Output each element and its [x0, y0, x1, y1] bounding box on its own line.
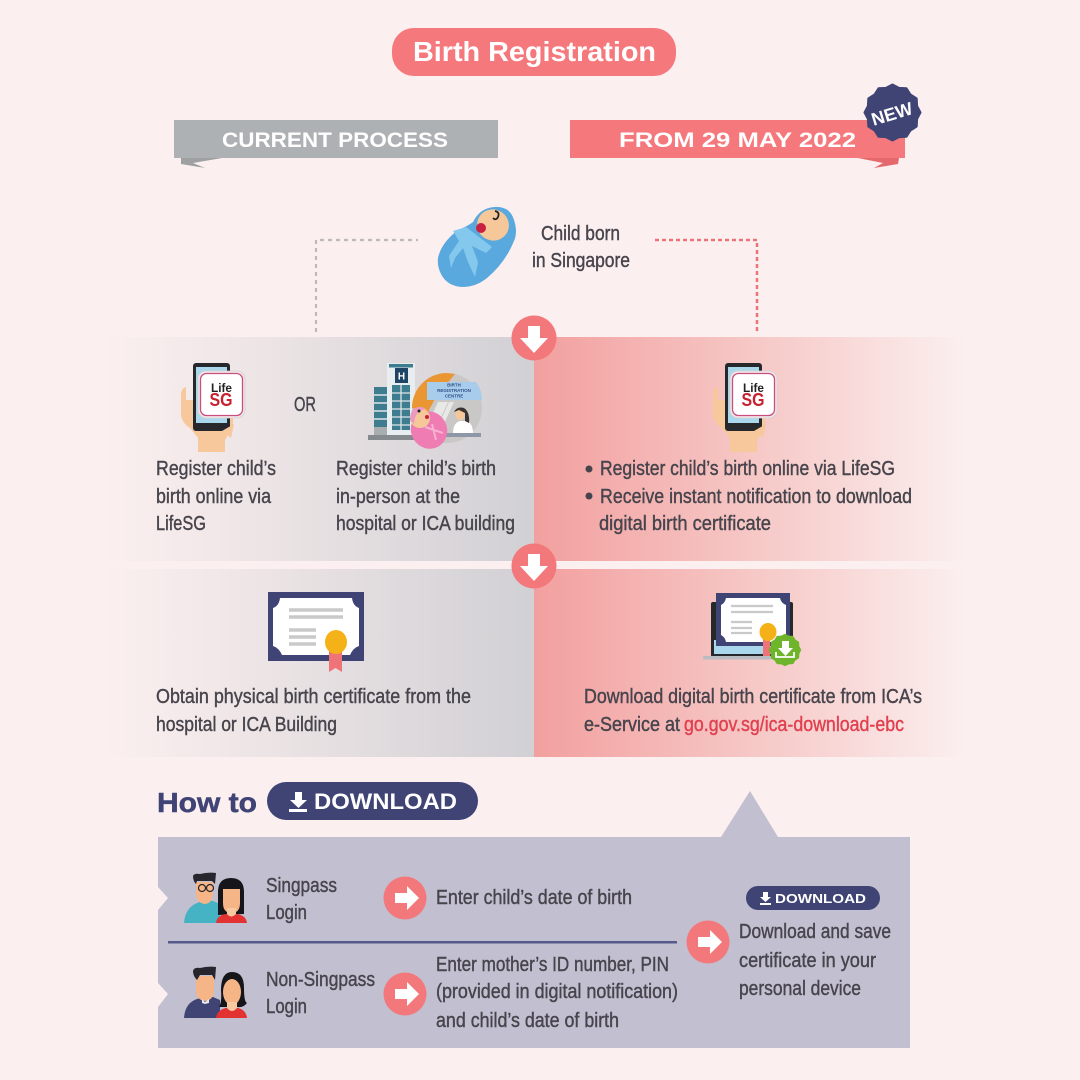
panel: new process, register: [534, 337, 965, 561]
heading: how to download: DOWNLOAD: [314, 789, 457, 814]
arrow: step one: [512, 316, 556, 360]
arrow: step two: [512, 544, 556, 588]
title: Birth Registration: [413, 36, 656, 67]
icon: phone with LifeSG: Life: [211, 381, 232, 395]
icon: phone with LifeSG: SG: [742, 390, 764, 410]
text: register in person: [336, 458, 515, 535]
connector: red dashed line: [655, 240, 757, 332]
text: download digital certificate: [584, 686, 922, 736]
icon: hospital and registration centre: H: [398, 372, 405, 382]
button: download: [746, 886, 880, 910]
text: download digital certificate: Download digital birth certificate from ICA’s: [584, 686, 922, 708]
panel: current process, register: [105, 337, 534, 561]
banner: from 29 May 2022: [570, 120, 905, 168]
heading: how to download: [157, 782, 478, 820]
text: enter date of birth: Enter child’s date of birth: [436, 887, 632, 909]
text: new process bullets: [586, 458, 912, 535]
icon: hospital and registration centre: BIRTH: [447, 382, 461, 388]
text: register online: [156, 458, 276, 535]
arrow: Singpass step: [384, 876, 426, 920]
text: download and save: [739, 921, 891, 1000]
banner: from 29 May 2022: FROM 29 MAY 2022: [619, 129, 856, 152]
text: register online: LifeSG: [156, 513, 206, 535]
text: obtain physical certificate: Obtain physical birth certificate from the: [156, 686, 471, 708]
icon: phone with LifeSG: SG: [210, 390, 232, 410]
text: or: OR: [294, 394, 316, 416]
label: child born in Singapore: in Singapore: [532, 250, 630, 272]
text: non-Singpass login: Non-Singpass: [266, 969, 375, 991]
text: register online: Register child’s: [156, 458, 276, 480]
text: new process bullets: Receive instant notification to download: [600, 486, 912, 508]
text: Singpass login: Login: [266, 902, 307, 924]
title: [392, 28, 676, 76]
badge: new: NEW: [869, 98, 915, 130]
icon: hospital and registration centre: CENTRE: [445, 394, 463, 398]
text: enter mother's details: [436, 954, 678, 1032]
text: register online: birth online via: [156, 486, 272, 508]
text: Singpass login: Singpass: [266, 875, 337, 897]
icon: laptop with digital certificate: [703, 593, 801, 666]
text: enter mother's details: Enter mother’s ID number, PIN: [436, 954, 669, 976]
arrow: non-Singpass step: [384, 972, 426, 1016]
text: download and save: certificate in your: [739, 950, 876, 972]
text: obtain physical certificate: [156, 686, 471, 736]
text: Singpass login: [266, 875, 337, 924]
text: enter mother's details: and child’s date of birth: [436, 1010, 619, 1032]
icon: hospital and registration centre: REGISTRATION: [437, 388, 471, 393]
heading: how to download: How to: [157, 787, 257, 818]
text: register in person: in-person at the: [336, 486, 460, 508]
icon: couple, non-Singpass: [184, 967, 247, 1018]
text: download and save: personal device: [739, 978, 861, 1000]
icon: couple, Singpass: [184, 873, 247, 923]
banner: current process: CURRENT PROCESS: [222, 129, 448, 152]
arrow: to download: [686, 920, 730, 964]
text: enter mother's details: (provided in digital notification): [436, 981, 678, 1003]
text: download digital certificate: e-Service at: [584, 714, 680, 736]
panel: new process, certificate: [534, 569, 965, 757]
text: download digital certificate: go.gov.sg/ica-download-ebc: [684, 714, 904, 736]
icon: physical certificate: [268, 592, 364, 672]
icon: phone with LifeSG: Life: [743, 381, 764, 395]
text: non-Singpass login: Login: [266, 996, 307, 1018]
button: download: DOWNLOAD: [775, 892, 866, 906]
text: register in person: hospital or ICA building: [336, 513, 515, 535]
text: download and save: Download and save: [739, 921, 891, 943]
icon: hospital and registration centre: [368, 363, 482, 455]
icon: phone with LifeSG: [181, 363, 245, 452]
text: non-Singpass login: [266, 969, 375, 1018]
icon: swaddled baby: [438, 204, 516, 287]
label: child born in Singapore: [532, 223, 630, 272]
text: new process bullets: digital birth certificate: [599, 513, 771, 535]
panel: how to download steps: [158, 791, 910, 1048]
banner: current process: [174, 120, 498, 168]
panel: current process, certificate: [105, 569, 534, 757]
connector: grey dashed line: [316, 240, 418, 332]
text: register in person: Register child’s birth: [336, 458, 496, 480]
text: obtain physical certificate: hospital or ICA Building: [156, 714, 337, 736]
text: new process bullets: Register child’s birth online via LifeSG: [600, 458, 895, 480]
icon: download: [289, 792, 307, 812]
badge: new: [864, 84, 920, 140]
label: child born in Singapore: Child born: [541, 223, 620, 245]
icon: phone with LifeSG: [713, 363, 777, 452]
